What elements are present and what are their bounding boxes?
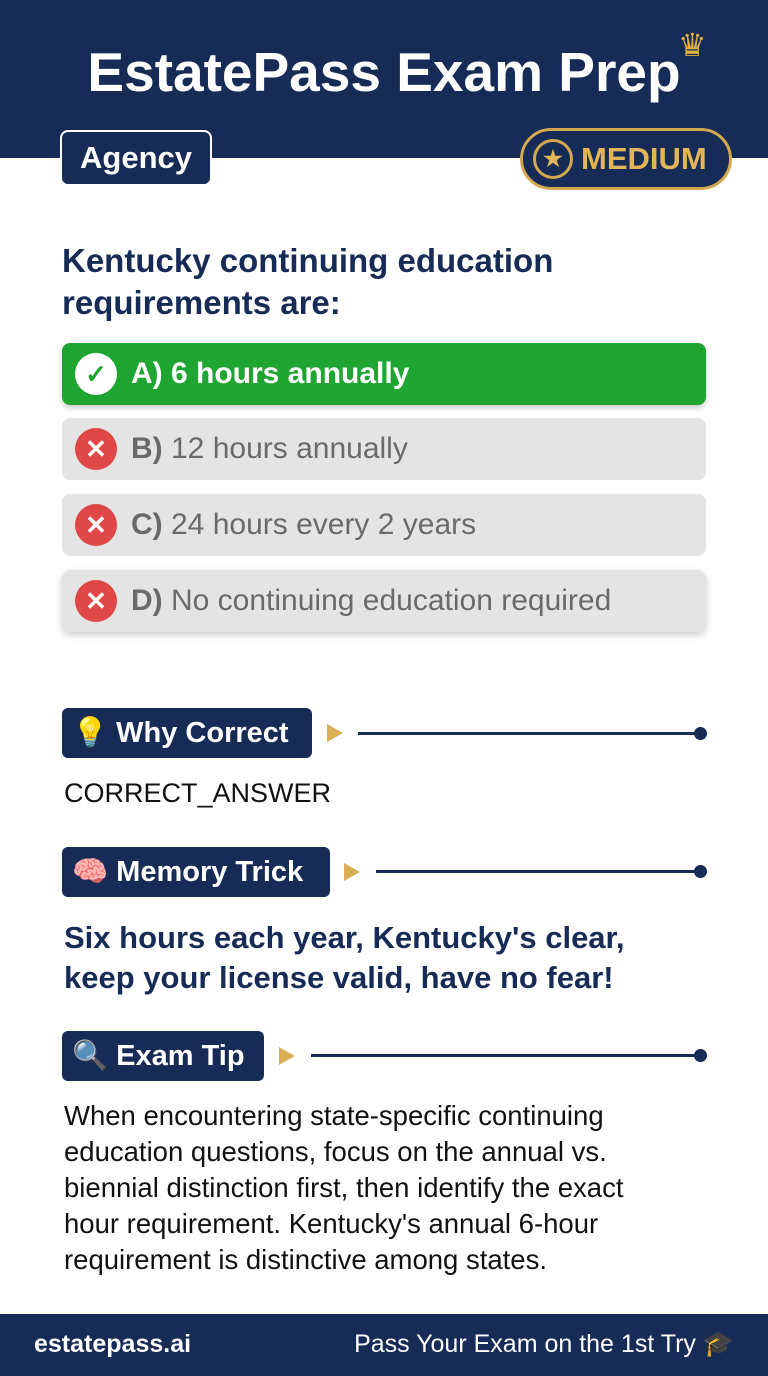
option C <box>62 494 706 556</box>
section heading: why correct <box>62 708 312 758</box>
exam tip text: biennial distinction first, then identify the exact <box>64 1172 623 1203</box>
title: EstatePass Exam Prep <box>87 41 681 103</box>
icon: crown: ♛ <box>678 27 707 63</box>
option A correct: ✓ <box>85 358 107 388</box>
option D <box>62 570 706 632</box>
exam tip text: hour requirement. Kentucky's annual 6-hour <box>64 1208 598 1239</box>
category badge: Agency <box>80 140 192 175</box>
category badge <box>60 130 212 186</box>
option B: ✕ <box>85 434 107 464</box>
option B <box>62 418 706 480</box>
section heading: exam tip <box>62 1031 264 1081</box>
section heading: memory trick <box>62 847 330 897</box>
why correct text: CORRECT_ANSWER <box>64 778 331 808</box>
arrow <box>279 1047 295 1065</box>
option D: No continuing education required <box>171 584 611 617</box>
difficulty badge: MEDIUM <box>581 141 707 176</box>
exam tip text <box>64 1100 624 1275</box>
option C: C) <box>131 508 163 541</box>
section heading: why correct: 💡 Why Correct <box>72 717 289 749</box>
option A correct: A) 6 hours annually <box>131 357 409 390</box>
exam tip text: education questions, focus on the annual vs. <box>64 1136 607 1167</box>
footer site: estatepass.ai <box>34 1330 191 1358</box>
difficulty badge: ★ <box>543 146 563 171</box>
arrow <box>327 724 343 742</box>
option A correct <box>62 343 706 405</box>
footer slogan: Pass Your Exam on the 1st Try 🎓 <box>354 1330 734 1358</box>
option D: ✕ <box>85 586 107 616</box>
option C: 24 hours every 2 years <box>171 508 476 541</box>
option D: D) <box>131 584 163 617</box>
header banner <box>0 0 768 158</box>
exam tip text: requirement is distinctive among states. <box>64 1244 547 1275</box>
memory trick text: Six hours each year, Kentucky's clear, keep your license valid, have no fear! <box>64 920 625 995</box>
section heading: memory trick: 🧠 Memory Trick <box>72 856 303 888</box>
difficulty badge <box>520 128 732 190</box>
footer <box>0 1314 768 1376</box>
arrow <box>344 863 360 881</box>
option B: B) <box>131 432 163 465</box>
section heading: exam tip: 🔍 Exam Tip <box>72 1040 245 1072</box>
option B: 12 hours annually <box>171 432 408 465</box>
question: Kentucky continuing education requirements are: <box>62 242 553 321</box>
exam tip text: When encountering state-specific continuing <box>64 1100 604 1131</box>
option C: ✕ <box>85 510 107 540</box>
